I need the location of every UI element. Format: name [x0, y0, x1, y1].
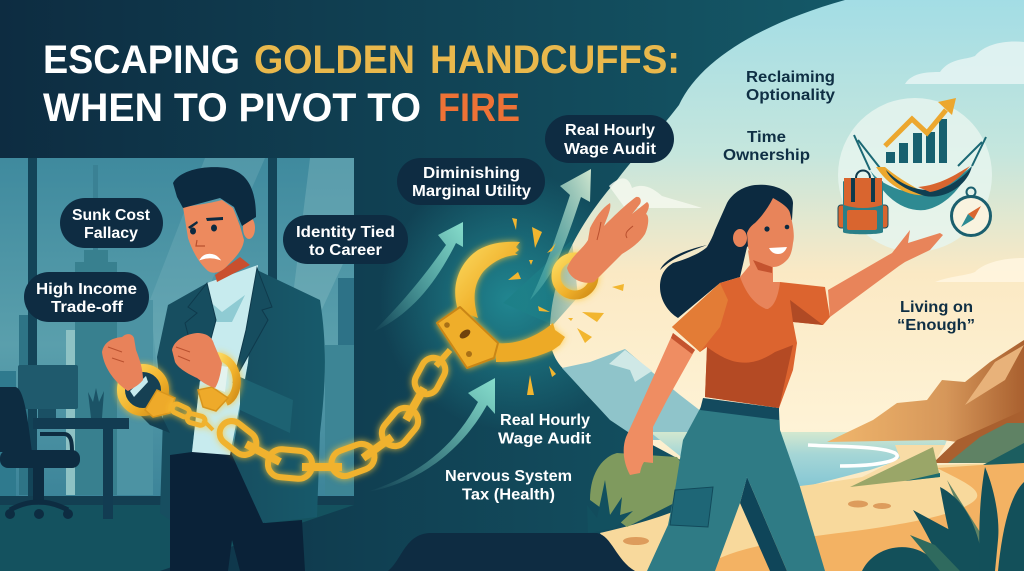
neck — [215, 257, 250, 282]
cliffs — [827, 340, 1024, 487]
sea — [650, 432, 950, 488]
clouds — [609, 42, 1024, 282]
freedom icons circle — [838, 98, 992, 252]
right shirt cuff — [214, 365, 228, 392]
man in suit — [102, 167, 325, 571]
label: time ownership — [723, 129, 810, 164]
surf line — [808, 445, 897, 466]
woman walking — [624, 185, 943, 571]
mouth — [201, 254, 219, 259]
title: HANDCUFFS: — [430, 38, 680, 82]
background: freedom side with sky — [550, 0, 1024, 571]
flyaway strand — [660, 245, 707, 270]
right fist — [172, 333, 222, 388]
pill: diminishing marginal utility: Marginal Utility — [412, 183, 531, 200]
white shirt cuff — [130, 376, 148, 397]
hammock — [854, 135, 986, 210]
title: GOLDEN — [254, 38, 415, 82]
back arm — [624, 333, 695, 475]
pill: sunk cost fallacy — [60, 198, 163, 248]
face — [183, 200, 244, 273]
label: reclaiming optionality: Optionality — [746, 87, 835, 104]
sleeve under left cuff — [130, 392, 170, 433]
far leg — [740, 477, 787, 571]
hair — [660, 185, 793, 318]
label: nervous system tax: Nervous System — [445, 468, 572, 485]
sleeve shadow — [790, 300, 823, 325]
pill: diminishing marginal utility — [397, 158, 545, 205]
pill: real hourly wage audit: Real Hourly — [565, 122, 655, 139]
label: reclaiming optionality — [746, 69, 835, 104]
neck — [740, 250, 780, 309]
pill: sunk cost fallacy: Fallacy — [84, 225, 138, 242]
label: living on enough: “Enough” — [897, 317, 975, 334]
golden chain — [171, 350, 450, 480]
title: FIRE — [438, 86, 520, 130]
sleeve — [672, 283, 728, 352]
freedom icons — [838, 98, 990, 236]
title — [43, 38, 680, 130]
trousers — [647, 403, 825, 571]
left fist — [102, 334, 143, 391]
lapels — [185, 268, 272, 383]
backpack — [838, 170, 888, 234]
features — [764, 225, 789, 254]
office window with skyline — [0, 158, 354, 505]
arrow: rising teal 3 — [530, 169, 591, 300]
label: living on enough — [897, 299, 975, 334]
freed hand with broken cuff — [556, 197, 649, 295]
pill: diminishing marginal utility: Diminishing — [423, 165, 520, 182]
label: nervous system tax — [445, 468, 572, 504]
bush — [587, 453, 700, 533]
raised arm — [828, 230, 943, 317]
growth arrow — [885, 98, 956, 146]
label: living on enough: Living on — [900, 299, 973, 316]
facial features — [188, 217, 223, 246]
title: WHEN TO PIVOT TO — [43, 86, 421, 130]
desk, monitor, plant and chair — [0, 365, 129, 519]
neck shadow — [753, 260, 772, 273]
arrow: rising teal 2 — [367, 378, 495, 492]
label: time ownership: Time — [747, 129, 786, 146]
pill: identity tied to career: to Career — [309, 242, 382, 259]
shirt collar shade — [208, 295, 245, 322]
sand footprints — [623, 500, 891, 545]
tropical plants — [862, 467, 1024, 571]
bar chart — [886, 119, 947, 163]
pill: high income trade-off — [24, 272, 149, 322]
finger creases — [108, 347, 190, 362]
teal light beam over the sky — [503, 240, 578, 325]
label: real hourly wage audit: Wage Audit — [498, 430, 591, 448]
pill: identity tied to career: Identity Tied — [296, 224, 395, 241]
pill: identity tied to career — [283, 215, 408, 264]
title: ESCAPING — [43, 38, 240, 82]
label: real hourly wage audit: Real Hourly — [500, 412, 590, 429]
shirt shadow — [705, 345, 793, 408]
jacket right panel — [232, 270, 325, 523]
ear — [733, 229, 747, 247]
right arm sleeve — [240, 377, 293, 433]
jacket left panel — [157, 283, 207, 520]
gold shards from the break — [508, 218, 624, 395]
small handcuff right — [198, 356, 237, 411]
ear — [243, 217, 255, 239]
pill: real hourly wage audit: Wage Audit — [564, 141, 656, 158]
pill: high income trade-off: Trade-off — [51, 299, 124, 316]
shirt — [672, 277, 830, 408]
trousers — [170, 450, 305, 571]
mountains — [562, 349, 722, 440]
pill: sunk cost fallacy: Sunk Cost — [72, 207, 150, 224]
dark floor blob — [388, 533, 635, 571]
label: reclaiming optionality: Reclaiming — [746, 69, 835, 86]
shirt — [192, 265, 258, 455]
pill: real hourly wage audit — [545, 115, 674, 163]
compass — [952, 188, 990, 236]
sleeve cuff — [671, 333, 695, 354]
face — [747, 198, 794, 267]
belt — [700, 398, 779, 420]
label: nervous system tax: Tax (Health) — [462, 486, 555, 504]
hair — [173, 167, 256, 226]
label: time ownership: Ownership — [723, 147, 810, 164]
cargo pocket — [670, 487, 713, 527]
broken golden handcuff — [437, 242, 565, 368]
small handcuff left — [121, 368, 175, 417]
pill: high income trade-off: High Income — [36, 281, 137, 298]
label: real hourly wage audit — [498, 412, 591, 448]
beach — [600, 445, 1024, 571]
arrow: rising teal 1 — [373, 222, 463, 332]
